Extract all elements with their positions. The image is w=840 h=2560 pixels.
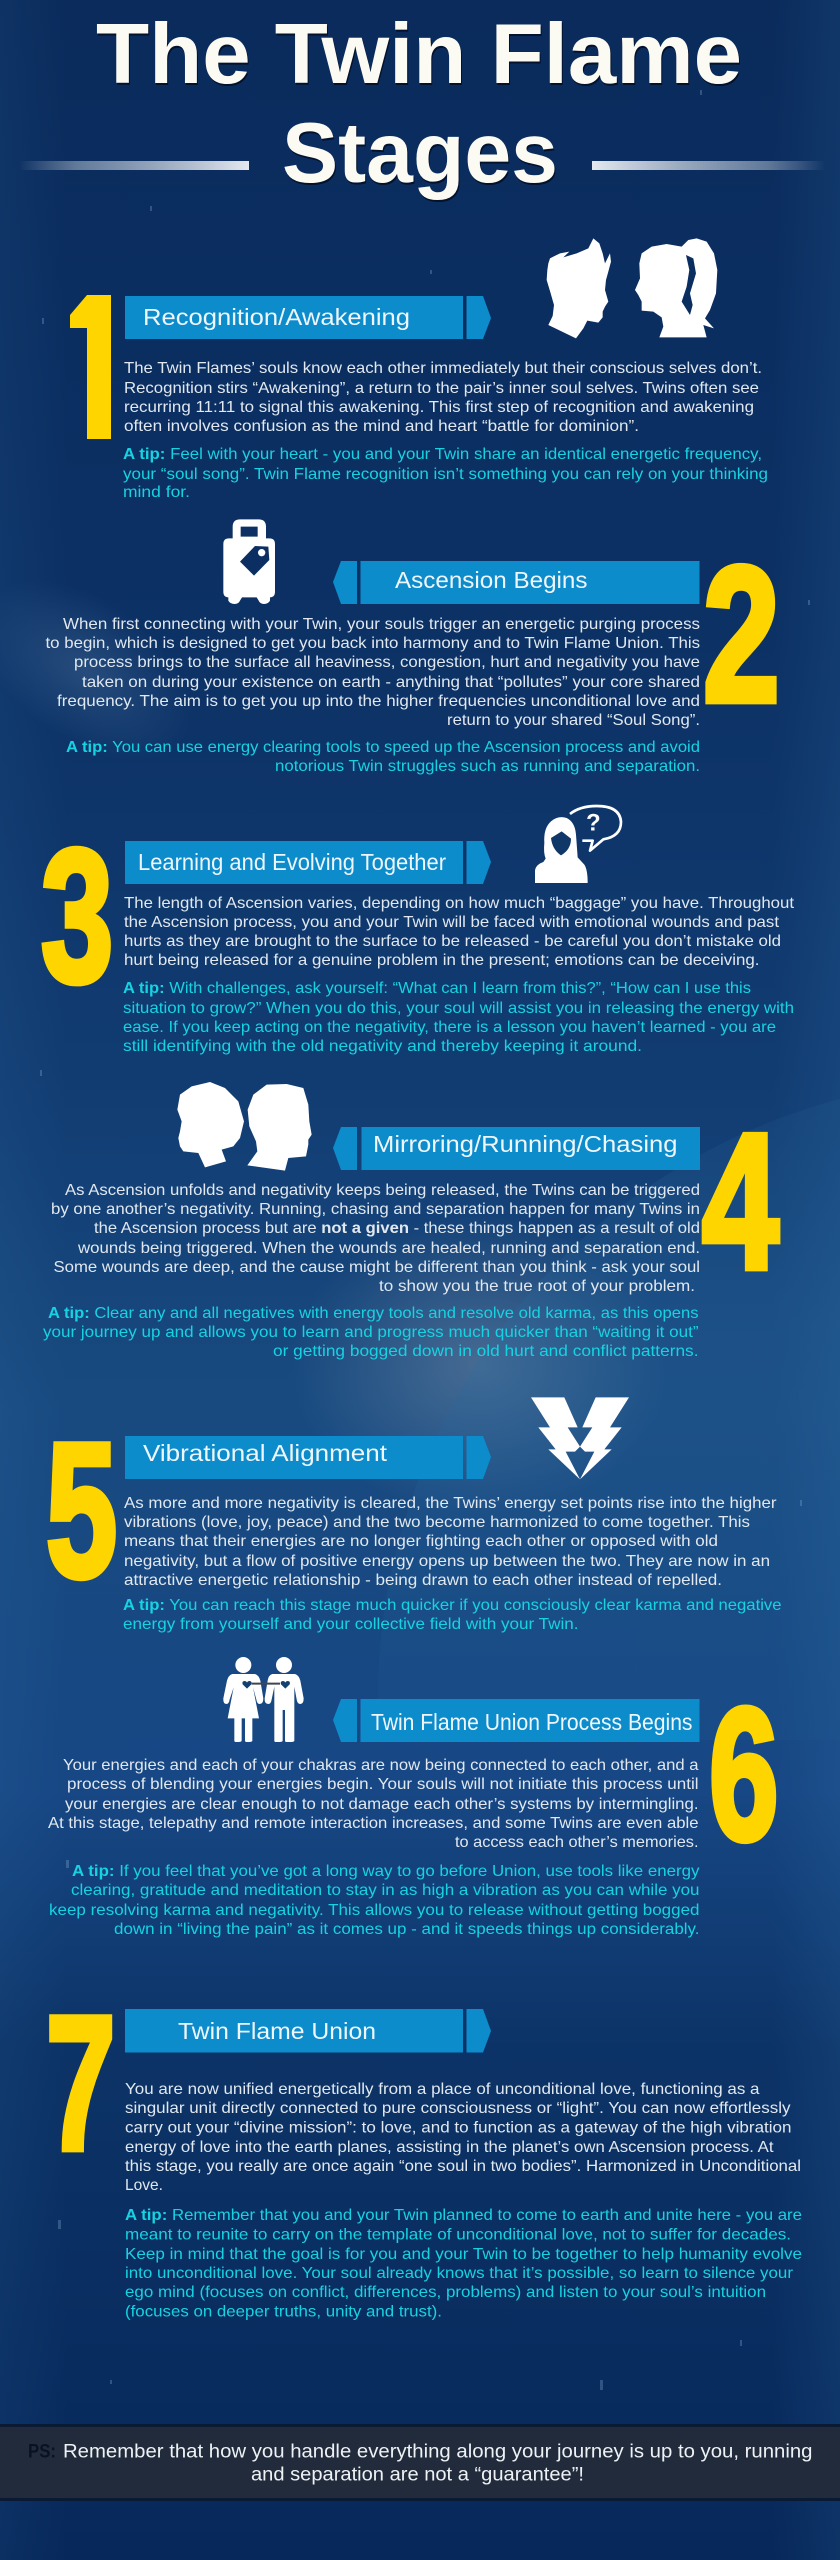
- stage 7 tip: ego mind (focuses on conflict, differences, problems) and listen to your soul’s intuition: [125, 2284, 766, 2301]
- stage 4 description: by one another’s negativity. Running, chasing and separation happen for many Twins in: [51, 1201, 700, 1218]
- stage 2 description: When first connecting with your Twin, your souls trigger an energetic purging process: [63, 616, 700, 633]
- title: The Twin Flame: [96, 7, 742, 102]
- stage 5 numeral: 5: [46, 1404, 117, 1617]
- stage 6 description: process of blending your energies begin. Your souls will not initiate this process until: [67, 1776, 699, 1793]
- stage 4 description: to show you the true root of your problem.: [379, 1278, 695, 1295]
- stage 3 tip: [123, 980, 794, 1055]
- stage 7 description: singular unit directly connected to pure consciousness or “light”. You can now effortlessly: [125, 2100, 790, 2117]
- stage 7 description: energy of love into the earth planes, assisting in the planet’s own Ascension process. At: [125, 2139, 774, 2156]
- stage 7 tip: Keep in mind that the goal is for you and your Twin to be together to help humanity evolve: [125, 2246, 802, 2263]
- title: [96, 7, 742, 201]
- stage 5 description: means that their energies are no longer fighting each other or opposed with old: [124, 1533, 718, 1550]
- icon: person with question bubble: [535, 806, 621, 883]
- stage 5 tip: A tip: You can reach this stage much quicker if you consciously clear karma and negative: [123, 1597, 782, 1614]
- stage 3 tip: A tip: With challenges, ask yourself: “What can I learn from this?”, “How can I use this: [123, 980, 751, 997]
- stage 7 description: Love.: [125, 2177, 163, 2194]
- stage 2 tip: [66, 739, 700, 775]
- stage 2 banner: [333, 561, 700, 604]
- stage 3 numeral: 3: [41, 811, 113, 1022]
- stage 3 banner: Learning and Evolving Together: [138, 849, 446, 875]
- stage 6 description: Your energies and each of your chakras are now being connected to each other, and a: [63, 1757, 699, 1774]
- stage 7 description: You are now unified energetically from a place of unconditional love, functioning as a: [125, 2081, 760, 2098]
- stage 1 tip: [123, 446, 768, 501]
- stage 4 description: wounds being triggered. When the wounds are healed, running and separation end.: [77, 1240, 700, 1257]
- stage 6 description: At this stage, telepathy and remote interaction increases, and some Twins are even able: [48, 1815, 699, 1832]
- stage 3 description: The length of Ascension varies, depending on how much “baggage” you have. Throughout: [124, 895, 795, 912]
- stage 2 description: frequency. The aim is to get you up into the higher frequencies unconditional love and: [57, 693, 700, 710]
- PS bar: and separation are not a “guarantee”!: [251, 2464, 584, 2486]
- stage 5 banner: Vibrational Alignment: [143, 1440, 388, 1466]
- stage 4 tip: [43, 1305, 698, 1360]
- icon: person with question bubble: ?: [586, 809, 601, 836]
- stage 7 tip: into unconditional love. Your soul already knows that it’s possible, so learn to silence your: [125, 2265, 794, 2282]
- icon: man and woman silhouettes: [547, 238, 717, 338]
- stage 1 numeral: 1: [64, 262, 159, 481]
- stage 1 description: recurring 11:11 to signal this awakening. This first step of recognition and awakening: [124, 399, 754, 416]
- stage 7 banner: [125, 2009, 491, 2052]
- stage 2 description: to begin, which is designed to get you back into harmony and to Twin Flame Union. This: [46, 635, 700, 652]
- stage 7 tip: (focuses on deeper truths, unity and trust).: [125, 2304, 442, 2320]
- stage 6 banner: Twin Flame Union Process Begins: [371, 1709, 692, 1735]
- stage 1 tip: A tip: Feel with your heart - you and your Twin share an identical energetic frequency,: [123, 446, 762, 463]
- stage 3 description: the Ascension process, you and your Twin will be faced with emotional wounds and past: [124, 914, 780, 931]
- PS bar: PS:: [28, 2442, 56, 2462]
- stage 1 description: [124, 360, 762, 435]
- stage 6 tip: [49, 1863, 700, 1938]
- stage 7 numeral: 7: [46, 1977, 116, 2190]
- icon: twin lightning bolts: [531, 1397, 629, 1479]
- stage 4 tip: or getting bogged down in old hurt and conflict patterns.: [273, 1343, 698, 1360]
- stage 2 description: taken on during your existence on earth - anything that “pollutes” your core shared: [82, 674, 700, 691]
- stage 4 banner: Mirroring/Running/Chasing: [373, 1131, 678, 1157]
- stage 7 tip: meant to reunite to carry on the template of unconditional love, not to suffer for decades.: [125, 2226, 791, 2244]
- stage 1 description: The Twin Flames’ souls know each other immediately but their conscious selves don’t.: [124, 360, 762, 377]
- stage 6 description: [48, 1757, 699, 1851]
- stage 1 numeral: [70, 295, 111, 439]
- stage 4 description: [51, 1182, 700, 1295]
- stage 2 tip: A tip: You can use energy clearing tools to speed up the Ascension process and avoid: [66, 739, 700, 756]
- stage 1 tip: your “soul song”. Twin Flame recognition isn’t something you can rely on your thinking: [123, 466, 768, 483]
- stage 7 description: [125, 2081, 801, 2194]
- stage 3 banner: [125, 841, 491, 884]
- stage 5 description: attractive energetic relationship - being drawn to each other instead of repelled.: [124, 1572, 722, 1589]
- stage 7 banner: Twin Flame Union: [178, 2018, 376, 2044]
- stage 5 description: negativity, but a flow of positive energy opens up between the two. They are now in an: [124, 1553, 770, 1570]
- stage 3 description: hurts as they are brought to the surface to be released - be careful you don’t mistake old: [124, 933, 781, 950]
- stage 4 tip: A tip: Clear any and all negatives with energy tools and resolve old karma, as this opens: [48, 1305, 698, 1322]
- stage 3 description: [124, 895, 795, 969]
- stage 2 numeral: 2: [703, 526, 780, 742]
- stage 5 tip: [123, 1597, 782, 1633]
- stage 5 tip: energy from yourself and your collective field with your Twin.: [123, 1616, 578, 1633]
- stage 6 numeral: 6: [709, 1668, 779, 1879]
- stage 4 numeral: 4: [702, 1093, 779, 1309]
- stage 7 tip: [125, 2207, 802, 2320]
- title: Stages: [282, 106, 558, 201]
- stage 3 tip: ease. If you keep acting on the negativity, there is a lesson you haven’t learned - you are: [123, 1019, 776, 1036]
- stage 1 tip: mind for.: [123, 484, 190, 501]
- stage 5 banner: [125, 1436, 491, 1479]
- stage 1 description: Recognition stirs “Awakening”, a return to the pair’s inner soul selves. Twins often see: [124, 380, 759, 397]
- icon: suitcase: [223, 519, 275, 604]
- stage 6 description: to access each other’s memories.: [455, 1834, 698, 1851]
- stage 6 description: your energies are clear enough to not damage each other’s systems by intermingling.: [65, 1796, 698, 1813]
- icon: couple connected at the heart: [223, 1657, 304, 1742]
- stage 4 banner: [333, 1127, 700, 1170]
- stage 2 banner: Ascension Begins: [395, 567, 588, 593]
- stage 2 description: [46, 616, 700, 729]
- stage 7 description: this stage, you really are once again “one soul in two bodies”. Harmonized in Unconditional: [125, 2158, 801, 2175]
- stage 6 tip: A tip: If you feel that you’ve got a long way to go before Union, use tools like energy: [72, 1863, 700, 1880]
- stage 7 description: carry out your “divine mission”: to love, and to function as a gateway of the high vibration: [125, 2120, 792, 2136]
- stage 2 tip: notorious Twin struggles such as running and separation.: [275, 758, 700, 775]
- stage 5 description: As more and more negativity is cleared, the Twins’ energy set points rise into the higher: [124, 1495, 777, 1512]
- stage 5 description: vibrations (love, joy, peace) and the two become harmonized to come together. This: [124, 1514, 750, 1531]
- stage 7 tip: A tip: Remember that you and your Twin planned to come to earth and unite here - you are: [125, 2207, 802, 2224]
- stage 2 description: process brings to the surface all heaviness, congestion, hurt and negativity you have: [74, 654, 700, 671]
- stage 6 tip: down in “living the pain” as it comes up - and it speeds things up considerably.: [114, 1921, 700, 1938]
- stage 6 banner: [333, 1699, 700, 1742]
- stage 1 banner: Recognition/Awakening: [143, 304, 410, 330]
- stage 4 description: the Ascension process but are not a given - these things happen as a result of old: [94, 1220, 700, 1237]
- stage 3 tip: still identifying with the old negativity and thereby keeping it around.: [123, 1038, 642, 1055]
- stage 4 description: Some wounds are deep, and the cause might be different than you think - ask your soul: [54, 1259, 700, 1276]
- stage 4 description: As Ascension unfolds and negativity keeps being released, the Twins can be triggered: [65, 1182, 700, 1199]
- stage 1 description: often involves confusion as the mind and heart “battle for dominion”.: [124, 418, 639, 435]
- PS bar: [0, 2424, 840, 2501]
- stage 4 tip: your journey up and allows you to learn and progress much quicker than “waiting it out”: [43, 1324, 698, 1341]
- icon: two heads back to back: [177, 1082, 312, 1171]
- PS bar: Remember that how you handle everything along your journey is up to you, running: [63, 2442, 812, 2462]
- stage 1 banner: [125, 296, 491, 339]
- stage 3 tip: situation to grow?” When you do this, your soul will assist you in releasing the energy with: [123, 1000, 794, 1017]
- stage 6 tip: clearing, gratitude and meditation to stay in as high a vibration as you can while you: [71, 1882, 700, 1899]
- stage 3 description: hurt being released for a genuine problem in the present; emotions can be deceiving.: [124, 952, 760, 969]
- stage 6 tip: keep resolving karma and negativity. This allows you to release without getting bogged: [49, 1902, 700, 1919]
- stage 5 description: [124, 1495, 777, 1589]
- stage 2 description: return to your shared “Soul Song”.: [447, 712, 700, 729]
